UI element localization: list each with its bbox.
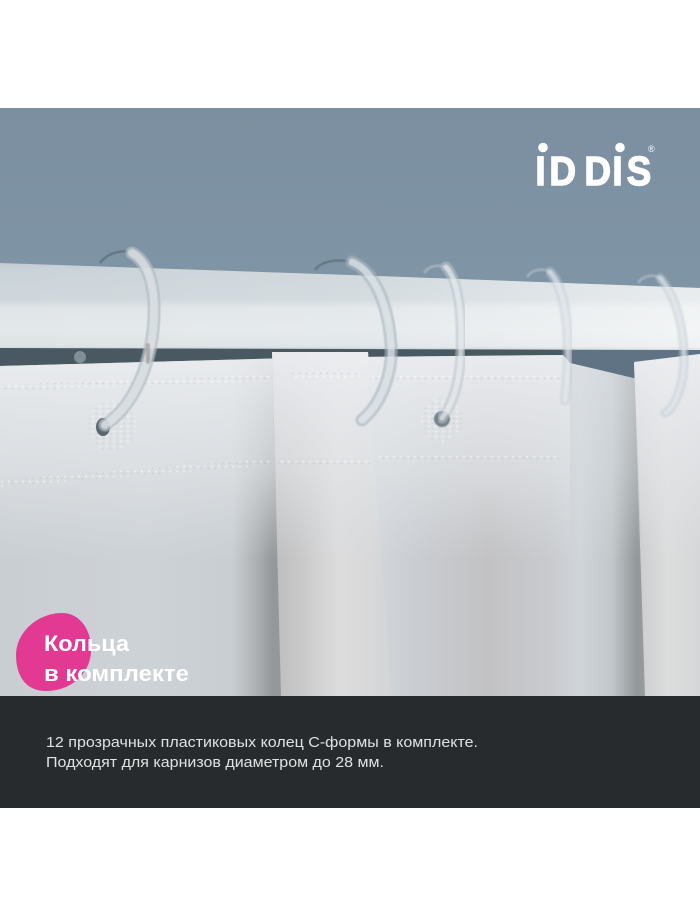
ring backs	[100, 251, 350, 270]
heading: rings included: в комплекте	[44, 661, 189, 686]
small detail ring cap	[74, 351, 86, 363]
ring 2	[352, 262, 391, 420]
dark caption band	[0, 696, 700, 808]
ring 4	[550, 272, 568, 400]
curtain panel left	[0, 358, 290, 696]
logo: IDDIS: IDDIS	[535, 149, 651, 194]
ring 5	[660, 278, 684, 413]
caption text: Подходят для карнизов диаметром до 28 мм.	[46, 754, 384, 771]
pink blob	[16, 613, 91, 691]
infographic	[0, 108, 700, 808]
ring 1	[105, 253, 154, 425]
ring 3	[442, 267, 461, 418]
caption text	[46, 734, 478, 771]
grommet hole	[96, 418, 110, 436]
heading: rings included: Кольца	[44, 631, 130, 656]
curtain fold center	[272, 352, 370, 696]
heading: rings included	[44, 631, 189, 686]
curtain panel middle and right	[360, 355, 650, 696]
shadow gap under rod	[0, 348, 570, 366]
photo: shower curtain on rod	[0, 108, 700, 696]
caption text: 12 прозрачных пластиковых колец С-формы в комплекте.	[46, 734, 478, 751]
blue wall	[0, 108, 700, 288]
logo: IDDIS: ®	[648, 144, 655, 154]
curtain fold right	[634, 354, 700, 696]
perforated band	[0, 375, 270, 391]
curtain rod	[0, 263, 700, 350]
